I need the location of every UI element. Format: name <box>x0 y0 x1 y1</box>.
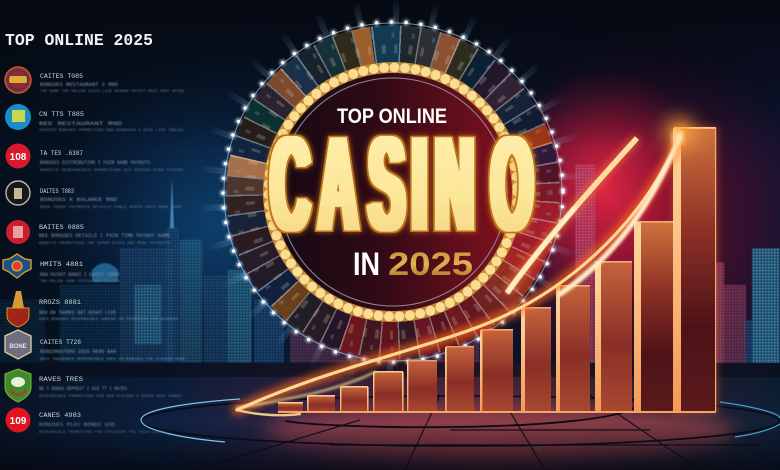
list item 4: MADE THOSE PAYMENTS DETAILS TABLE SUPER SAFE MORE GAME <box>40 206 183 210</box>
bar base glow <box>278 411 716 413</box>
bar 12 <box>673 127 716 412</box>
icon: red 109 badge <box>6 408 30 432</box>
list item 3: TA TES .6387 <box>40 150 83 157</box>
bar 4 <box>373 371 404 412</box>
icon: casino badge <box>5 67 31 93</box>
list item 7: SAFE BONUSES RESPONSIBLE GAMING ON PROMOTION FOR WINNERS <box>39 318 179 322</box>
list item 7 <box>7 291 179 327</box>
bar 8 <box>521 307 551 412</box>
bar 1 <box>278 402 303 412</box>
bar glow <box>672 126 718 414</box>
list item 4: DAITES T883 <box>40 188 74 195</box>
list item 10: RESPONSIBLE PROMOTIONS FOR TOPLAYERS THE VIDEO SLOTS <box>39 431 166 435</box>
heading: top online: TOP ONLINE <box>337 105 447 128</box>
main growth arrow <box>237 132 682 415</box>
wheel glow rays <box>206 2 580 377</box>
list item 2 <box>5 104 184 133</box>
outer lights <box>223 22 563 362</box>
icon: red badge <box>6 220 30 244</box>
heading: in 2025 <box>353 246 473 282</box>
sidebar title: TOP ONLINE 2025 <box>5 31 153 50</box>
list item 4: BONUSES K BALANCE RND <box>40 197 117 203</box>
list item 9: RAVES TRES <box>39 376 83 383</box>
icon: blue badge <box>5 104 31 130</box>
sidebar panel <box>2 31 186 435</box>
list item 7: RROZS 8881 <box>39 299 81 306</box>
icon: red 109 badge: 109 <box>10 416 27 427</box>
icon: ornate crest <box>3 254 31 278</box>
floor ring <box>141 396 780 446</box>
list item 3: WEBSITE RESPONSIBLE PROMOTIONS OUT REVIEW KING PLAYER <box>40 169 184 173</box>
icon: silver hexagon: BONE <box>9 344 27 350</box>
wheel separators <box>226 25 560 359</box>
bar 2 <box>307 395 335 412</box>
icon: black badge <box>6 181 30 205</box>
list item 6 <box>3 254 121 284</box>
gold bead ring <box>268 68 518 316</box>
list item 3: BONUSES DISTRIBUTION I FAIR GAME PAYOUTS <box>40 160 150 166</box>
bar 3 <box>340 386 369 412</box>
list item 6: NEW PAYOUT BONUS I SAFETY TERMS <box>40 272 120 278</box>
roulette wheel card ring <box>226 25 560 359</box>
list item 8 <box>5 330 186 362</box>
list item 4 <box>6 181 183 210</box>
list item 10 <box>6 408 166 435</box>
bar 10 <box>595 261 632 412</box>
list item 5: BEE BONUSES DETAILS I FAIR TIME PAYOUT GAME <box>39 233 170 239</box>
bar 9 <box>556 285 590 412</box>
list item 5: WEBSITE PROMOTIONS THE SUPER SLOTS AND MORE PAYMENTS <box>39 242 171 246</box>
bar 7 <box>480 329 513 412</box>
list item 5: BAITES 0885 <box>39 224 84 231</box>
left skyline <box>0 178 480 363</box>
heading: in 2025: 2025 <box>388 246 473 282</box>
list item 2: TRUSTED BONUSES PROMOTIONS AND WINNINGS V WIDE LIVE TABLES <box>39 129 184 133</box>
list item 3 <box>6 144 184 173</box>
disk ring <box>279 78 507 306</box>
icon: green shield <box>5 369 31 402</box>
card tile details <box>236 35 550 349</box>
list item 5 <box>6 220 171 246</box>
heading: casino: CASINO <box>271 109 533 259</box>
list item 9 <box>5 369 182 402</box>
list item 1 <box>5 67 185 94</box>
top vignette <box>0 0 780 150</box>
icon: red 108 badge <box>6 144 30 168</box>
icon: shield crest <box>7 291 29 327</box>
bar 11 <box>634 221 673 412</box>
list item 9: RESPONSIBLE PROMOTIONS FOR NEW PLAYERS X SUPER SAFE GAMES <box>39 395 182 399</box>
list item 1: THE GAME TOP ONLINE SLOTS LIVE WINNER PAYOUT RATE FREE SPINS <box>40 90 185 94</box>
list item 8: CAITES T728 <box>40 339 81 346</box>
floor <box>0 363 780 470</box>
arrow tip flare <box>664 117 696 149</box>
list item 8: BEST INSURANCE RESPONSIBLE SAFE ON BONUSES FOR PLAYERS GAME <box>40 358 186 362</box>
list item 8: BONUSMASTERS 2025 RENO BAR <box>40 349 116 355</box>
list item 2: CN TTS T885 <box>39 111 84 118</box>
list item 2: BEE RESTAURANT RND <box>39 121 122 127</box>
secondary growth arrow <box>507 138 637 293</box>
icon: silver hexagon <box>5 330 31 359</box>
list item 1: BONUSES RESTAURANT 2 RND <box>40 82 118 88</box>
bar 6 <box>445 346 474 412</box>
list item 10: CANES 4983 <box>39 412 81 419</box>
list item 9: BE C BONUS DEPOSIT 2 ACE TT I RATES <box>39 386 127 392</box>
heading: in 2025: IN <box>353 246 380 282</box>
list item 1: CAITES T085 <box>40 73 83 80</box>
bar 5 <box>407 360 437 412</box>
list item 6: HMITS 4881 <box>40 261 83 268</box>
list item 10: BONUSES PLAY BONUS USD <box>39 422 115 428</box>
icon: red 108 badge: 108 <box>10 152 27 163</box>
inner disk <box>273 72 513 312</box>
list item 6: THE ONLINE GAME STATUS AND RESULTS <box>40 280 121 284</box>
list item 7: BEN ON THAMES BET RIGHT LIVE <box>39 310 116 316</box>
casino sparkles: CASINO <box>271 109 533 259</box>
right skyline <box>575 165 780 365</box>
